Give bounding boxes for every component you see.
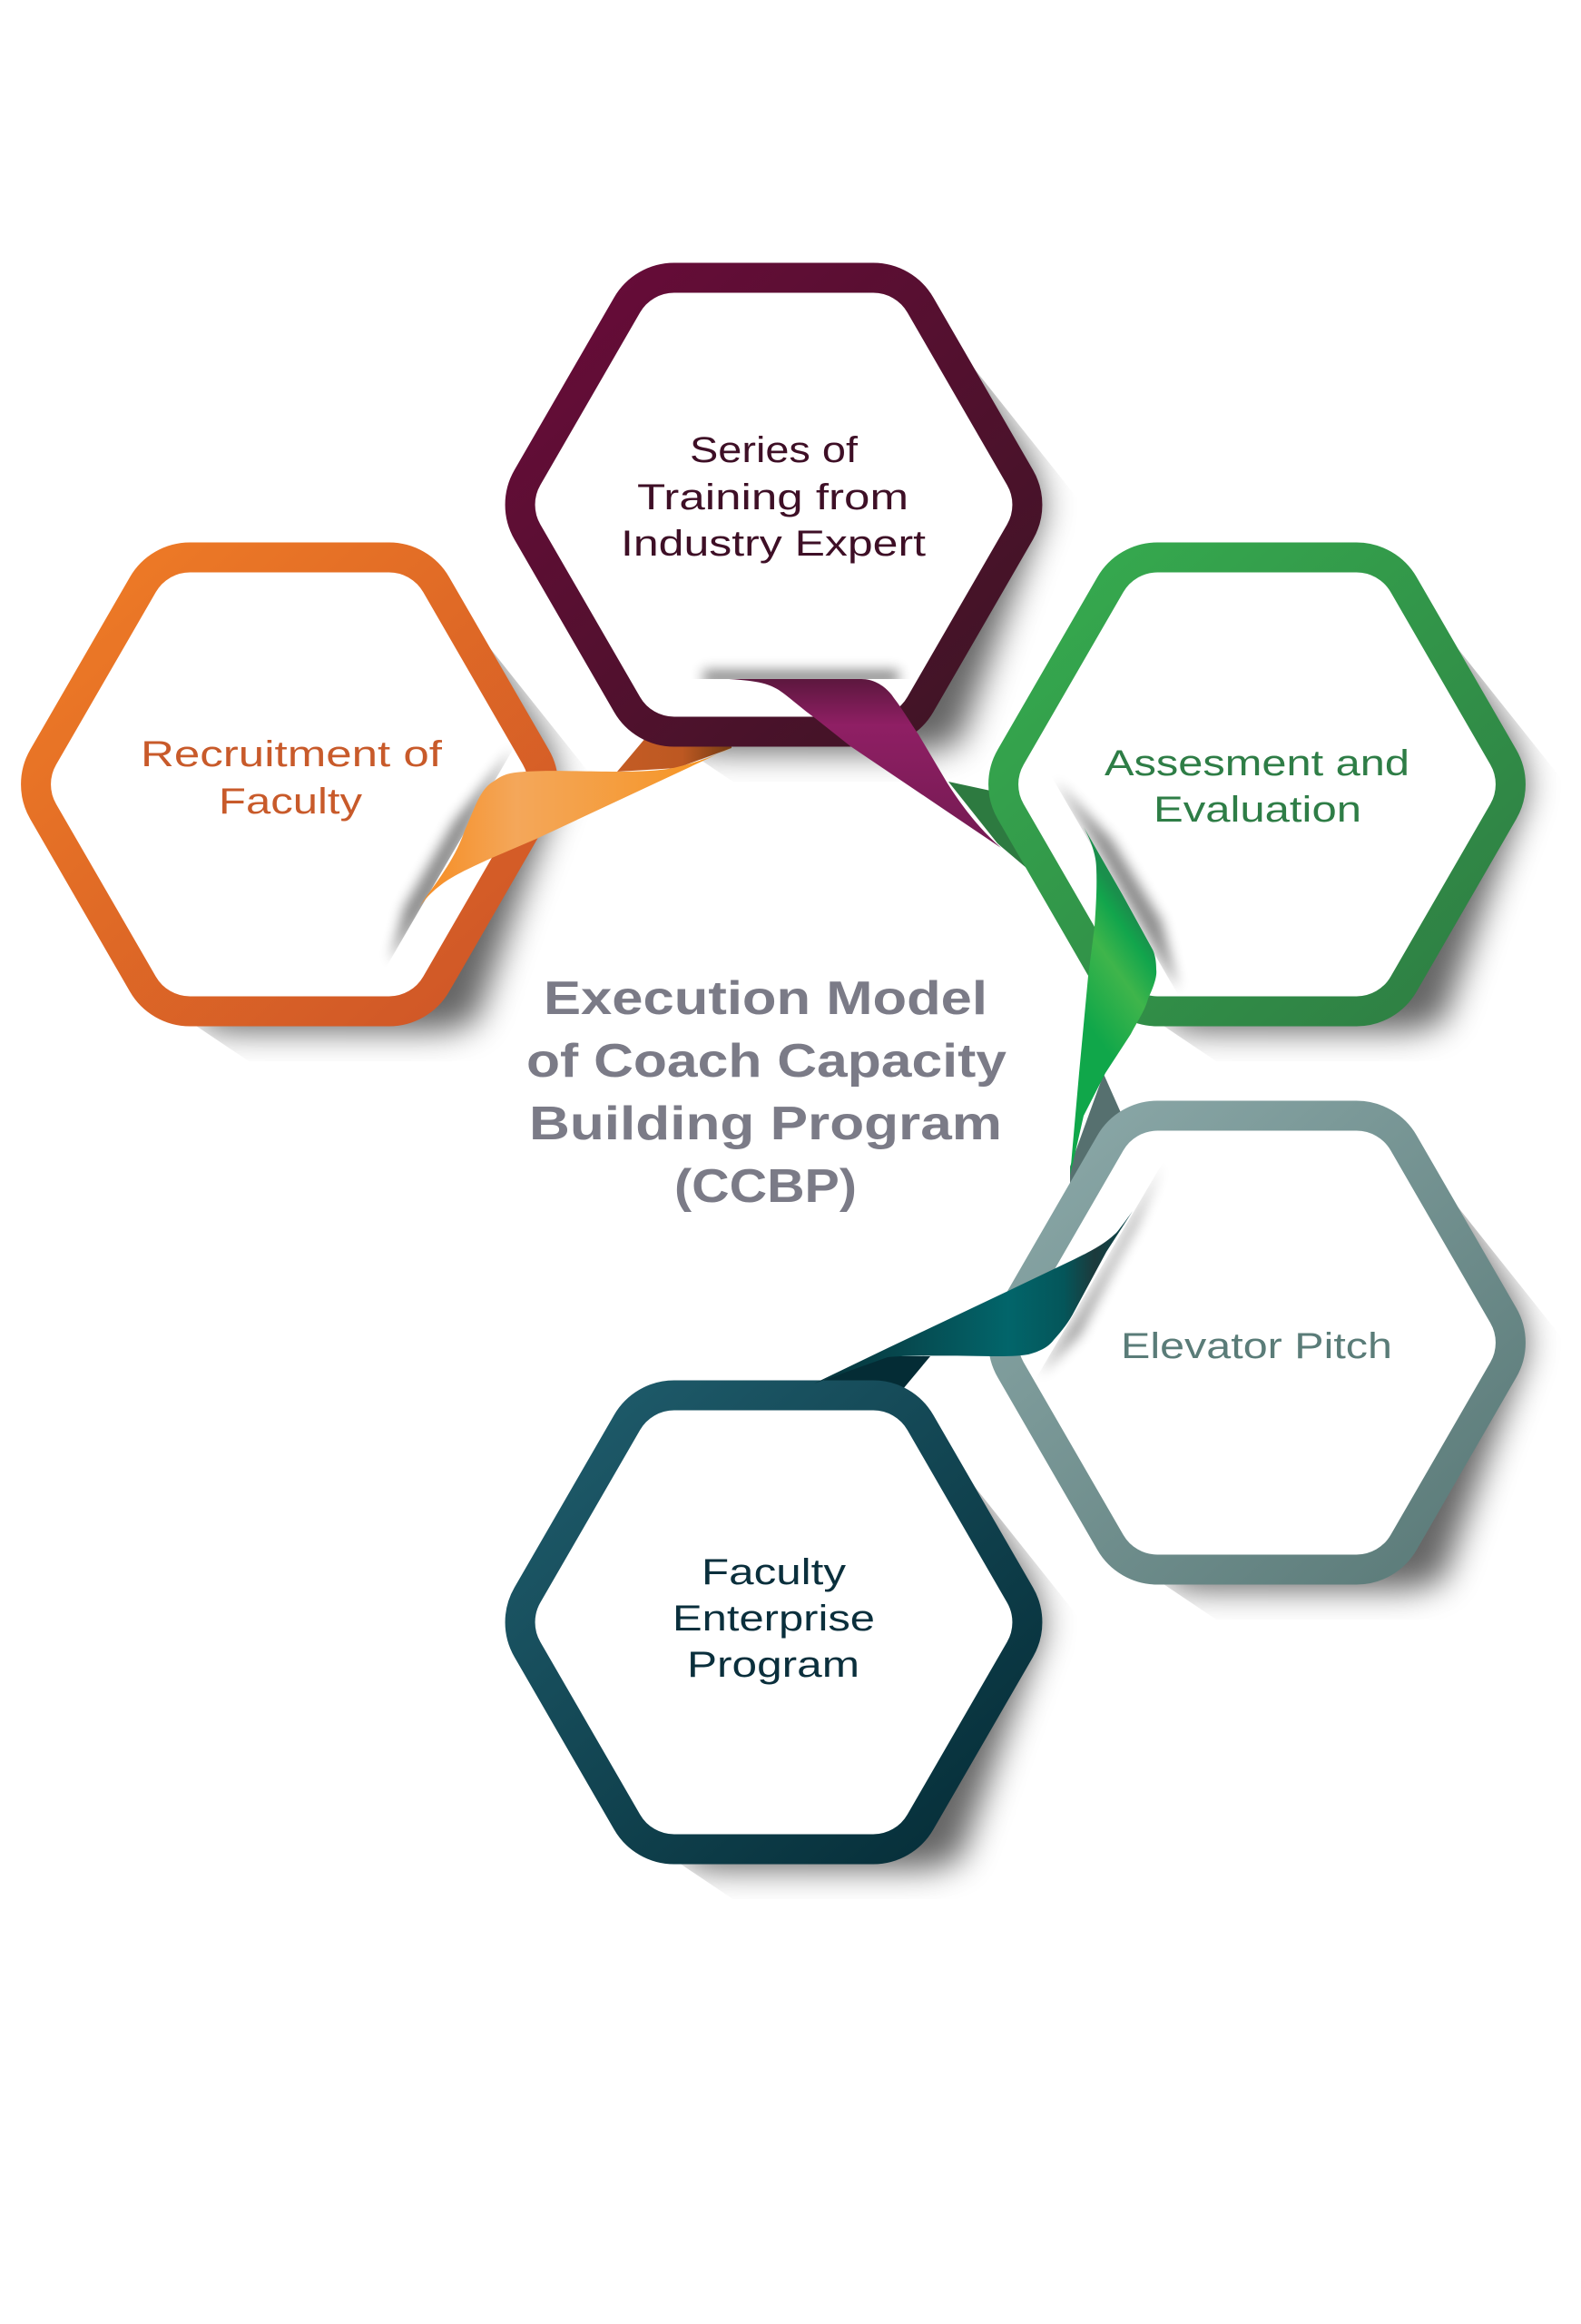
title <box>526 972 1007 1213</box>
hexagon: Faculty Enterprise Program: Enterprise <box>673 1599 875 1639</box>
title: of Coach Capacity <box>526 1035 1007 1088</box>
hexagon: Faculty Enterprise Program: Faculty <box>702 1552 846 1592</box>
title: Execution Model <box>544 972 987 1025</box>
hexagon drop shadows <box>196 359 1527 1869</box>
hexagon: Series of Training from Industry Expert <box>520 278 1027 732</box>
hexagon: Series of Training from Industry Expert: Series of <box>690 430 859 470</box>
ribbon: teal connector <box>814 1211 1133 1384</box>
ribbon backs behind hexagons <box>617 737 1122 1389</box>
ribbon: green connector <box>1070 827 1156 1176</box>
hexagon: Series of Training from Industry Expert: Industry Expert <box>621 524 926 564</box>
hexagon: Recruitment of Faculty: Faculty <box>219 782 362 822</box>
ribbon: purple connector <box>729 679 1001 848</box>
hexagon: Elevator Pitch <box>1004 1116 1510 1570</box>
hexagon: Recruitment of Faculty <box>36 557 543 1011</box>
hexagon: Elevator Pitch: Elevator Pitch <box>1121 1326 1392 1366</box>
flap shadows inside hexagons <box>390 670 1178 1375</box>
title: (CCBP) <box>674 1160 857 1213</box>
ribbon: orange connector <box>419 747 732 907</box>
title: Building Program <box>529 1098 1002 1150</box>
hexagon: Recruitment of Faculty: Recruitment of <box>141 734 443 774</box>
hexagon: Assesment and Evaluation: Assesment and <box>1105 743 1409 783</box>
hexagon: Assesment and Evaluation <box>1004 557 1510 1011</box>
hexagon: Series of Training from Industry Expert: Training from <box>637 478 908 517</box>
hexagon: Faculty Enterprise Program <box>520 1395 1027 1849</box>
hexagon: Assesment and Evaluation: Evaluation <box>1154 790 1361 830</box>
hexagon: Faculty Enterprise Program: Program <box>687 1645 859 1685</box>
